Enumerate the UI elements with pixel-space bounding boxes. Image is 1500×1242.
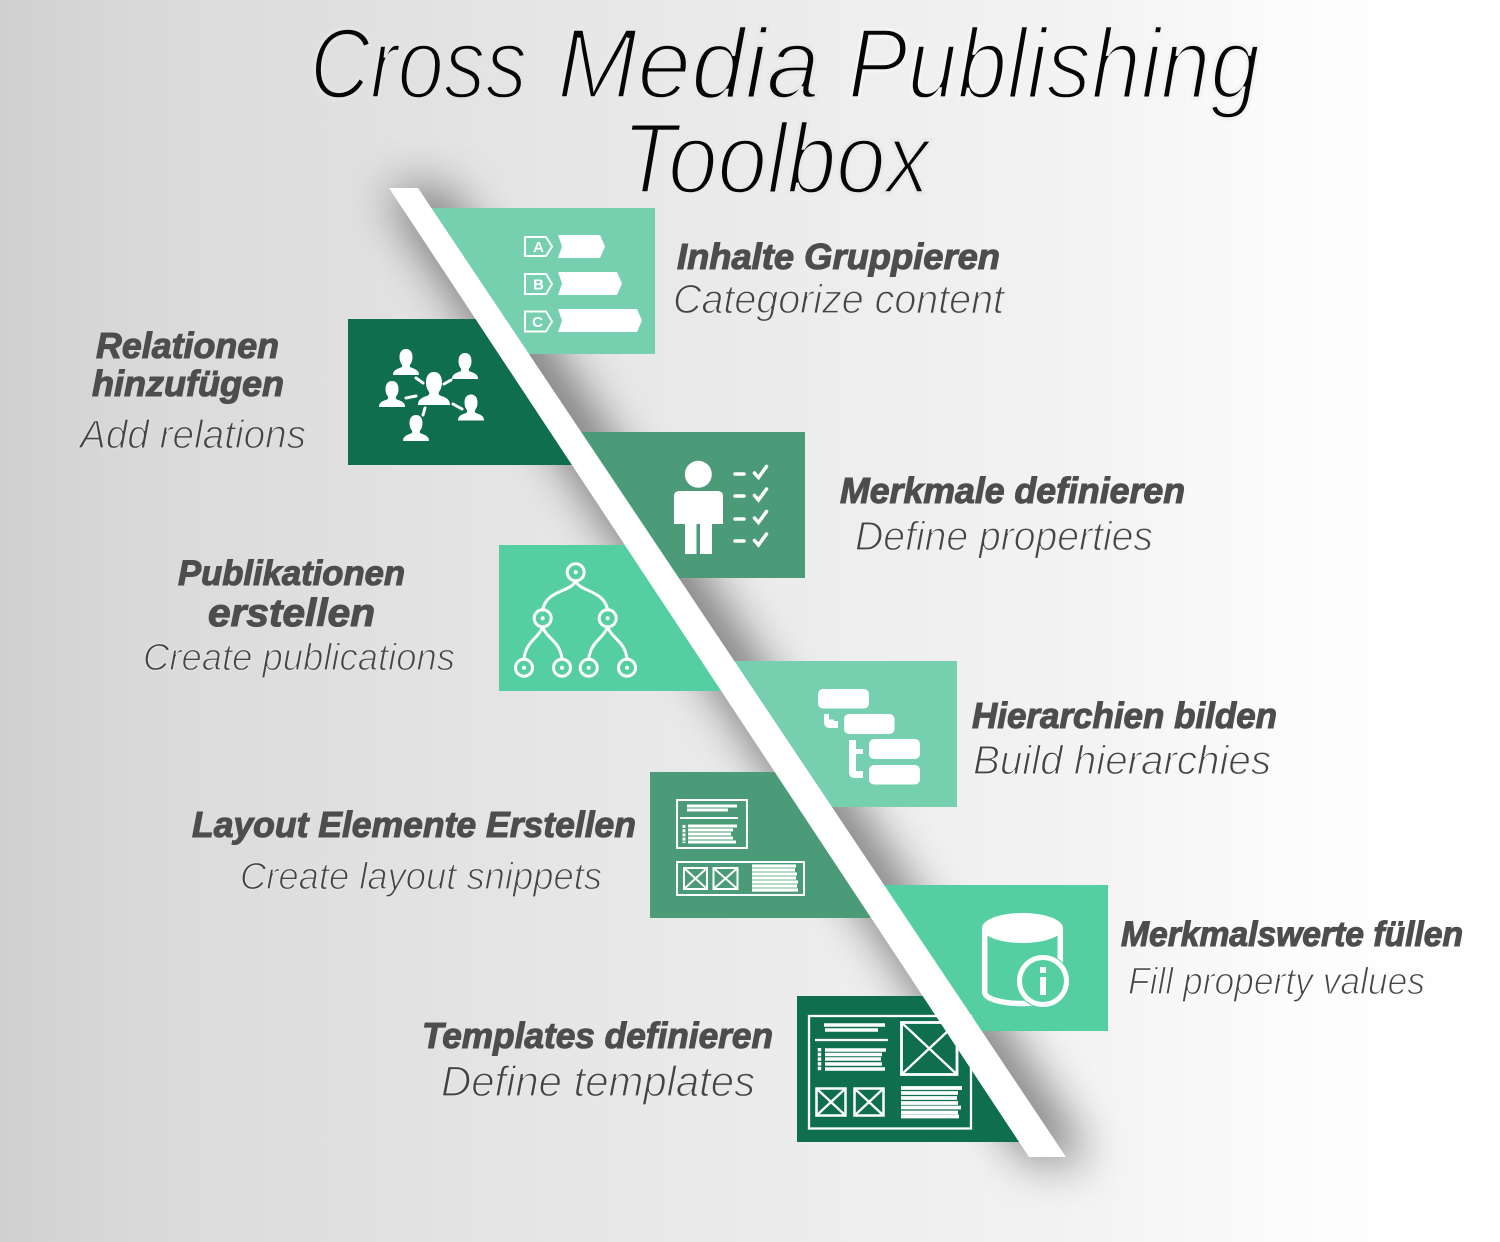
- icon: hierarchy blocks: [818, 689, 920, 784]
- panel: Layout Elemente Erstellen: [650, 772, 888, 918]
- panel: Relationen hinzufügen: [348, 319, 588, 465]
- label: Merkmale definieren: [840, 470, 1185, 559]
- icon: page template: [809, 1016, 971, 1128]
- label: Merkmalswerte füllen: [1121, 915, 1463, 1003]
- label: Relationen hinzufügen: hinzufügen: [92, 363, 284, 404]
- label: Layout Elemente Erstellen: Create layout snippets: [240, 856, 602, 898]
- label: Hierarchien bilden: [972, 695, 1277, 783]
- panel: Templates definieren: [797, 996, 1034, 1142]
- label: Hierarchien bilden: Hierarchien bilden: [972, 695, 1277, 736]
- label: Templates definieren: Templates definieren: [422, 1015, 773, 1056]
- icon: A B C categories: B: [533, 276, 544, 294]
- title: [310, 8, 1260, 215]
- label: Merkmalswerte füllen: Merkmalswerte füllen: [1121, 915, 1463, 954]
- label: Templates definieren: [422, 1015, 773, 1106]
- icon: database with info: [982, 913, 1070, 1008]
- title: Toolbox: [622, 103, 933, 215]
- label: Relationen hinzufügen: Add relations: [78, 413, 306, 457]
- label: Layout Elemente Erstellen: Layout Elemente Erstellen: [192, 804, 636, 845]
- icon: branching tree: [516, 564, 636, 676]
- title: Media: [557, 8, 820, 120]
- icon: A B C categories: C: [532, 314, 543, 331]
- label: Publikationen erstellen: Publikationen: [178, 554, 405, 593]
- panel: Merkmalswerte füllen: [866, 885, 1108, 1031]
- label: Merkmale definieren: Merkmale definieren: [840, 470, 1185, 511]
- panel: Merkmale definieren: [565, 432, 805, 578]
- diagonal strip shadow: [386, 190, 1089, 1160]
- panel: Hierarchien bilden: [716, 661, 957, 807]
- label: Merkmalswerte füllen: Fill property values: [1128, 961, 1425, 1003]
- label: Inhalte Gruppieren: Inhalte Gruppieren: [677, 236, 1000, 277]
- diagonal white strip: [389, 188, 1066, 1157]
- panel: Inhalte Gruppieren: [417, 208, 655, 354]
- label: Templates definieren: Define templates: [441, 1058, 755, 1106]
- icon: A B C categories: A: [533, 239, 544, 256]
- label: Publikationen erstellen: erstellen: [208, 592, 375, 635]
- label: Inhalte Gruppieren: [673, 236, 1006, 322]
- icon: layout snippets: [677, 800, 804, 895]
- label: Publikationen erstellen: [143, 554, 455, 679]
- icon: person with checklist: [674, 461, 766, 554]
- label: Publikationen erstellen: Create publications: [143, 637, 455, 679]
- title: Cross: [310, 8, 527, 120]
- label: Hierarchien bilden: Build hierarchies: [973, 737, 1271, 783]
- icon: people network: [379, 349, 484, 441]
- label: Relationen hinzufügen: Relationen: [96, 325, 279, 366]
- panel: Publikationen erstellen: [499, 545, 737, 691]
- label: Merkmale definieren: Define properties: [855, 513, 1153, 559]
- label: Layout Elemente Erstellen: [192, 804, 636, 898]
- label: Inhalte Gruppieren: Categorize content: [673, 276, 1006, 322]
- label: Relationen hinzufügen: [78, 325, 306, 457]
- icon: A B C categories: [525, 235, 642, 332]
- title: Publishing: [848, 8, 1260, 120]
